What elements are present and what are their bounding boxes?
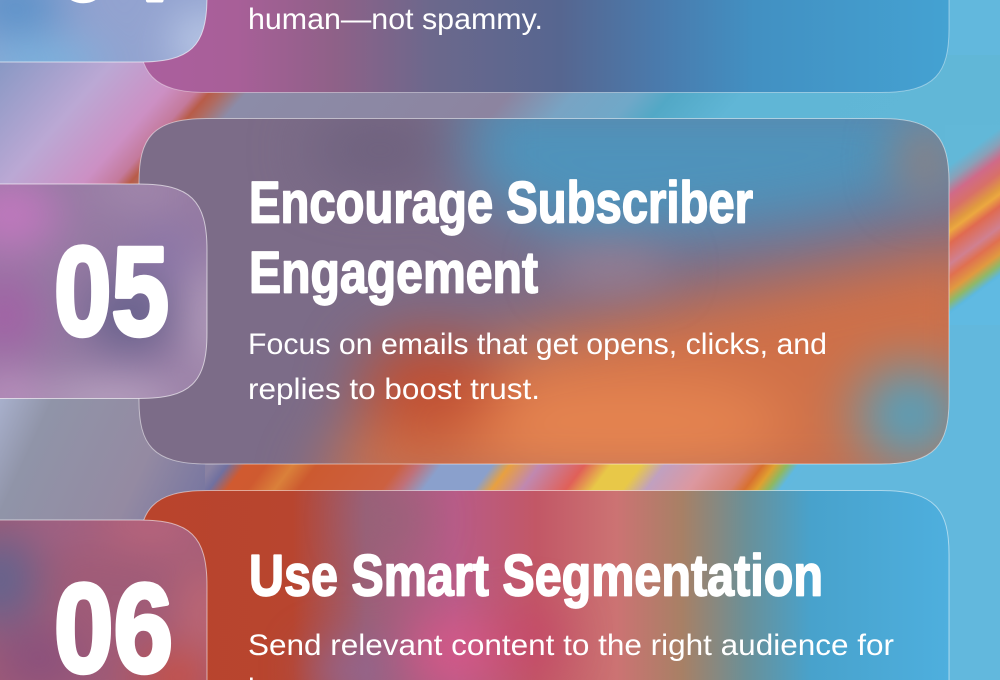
heading: step 06: Use Smart Segmentation <box>249 544 823 608</box>
panel: step 05 card <box>138 118 950 464</box>
number tile: 04 <box>0 0 208 62</box>
heading: step 05: Encourage Subscriber <box>249 170 753 236</box>
heading: step 05: Engagement <box>249 240 538 306</box>
panel: step 04 card <box>130 0 960 100</box>
body text: step 04: human—not spammy. <box>248 3 543 36</box>
heading: step 05 <box>249 170 753 306</box>
number tile: 06 <box>0 520 208 680</box>
body text: step 06: Send relevant content to the right audience for <box>248 629 894 662</box>
body text: step 06 <box>248 629 894 680</box>
number tile: 05 <box>0 184 208 399</box>
body text: step 05 <box>248 328 827 406</box>
body text: step 05: Focus on emails that get opens, clicks, and <box>248 328 827 361</box>
panel: step 06 card <box>130 485 960 680</box>
step number 05: 05 <box>54 221 169 362</box>
body text: step 05: replies to boost trust. <box>248 373 540 406</box>
